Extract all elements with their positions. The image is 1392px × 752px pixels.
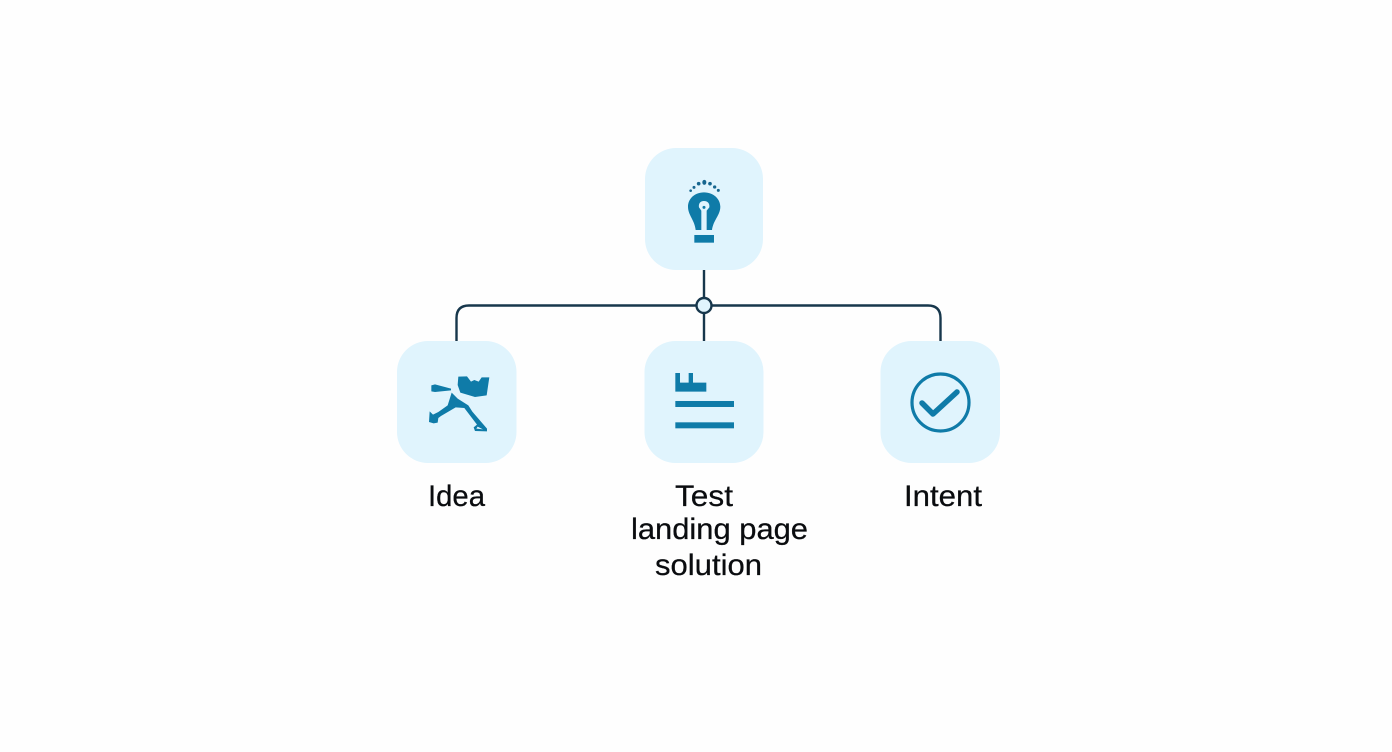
label: Test landing page solution	[631, 480, 808, 582]
label: Idea: Idea	[428, 480, 485, 513]
label: Test landing page solution: landing page	[631, 513, 808, 546]
icon: lightbulb	[688, 180, 720, 243]
card: test	[644, 341, 764, 463]
label: Test landing page solution: Test	[675, 480, 734, 513]
card: top lightbulb	[645, 148, 763, 270]
connector node	[696, 298, 712, 313]
card: intent	[880, 341, 1000, 463]
icon: check circle	[912, 374, 969, 431]
label: Test landing page solution: solution	[655, 549, 762, 582]
connector lines	[456, 270, 940, 341]
label: Intent: Intent	[904, 480, 983, 513]
card: idea	[397, 341, 516, 463]
icon: idea glyph	[429, 376, 489, 431]
icon: document lines	[675, 373, 734, 428]
